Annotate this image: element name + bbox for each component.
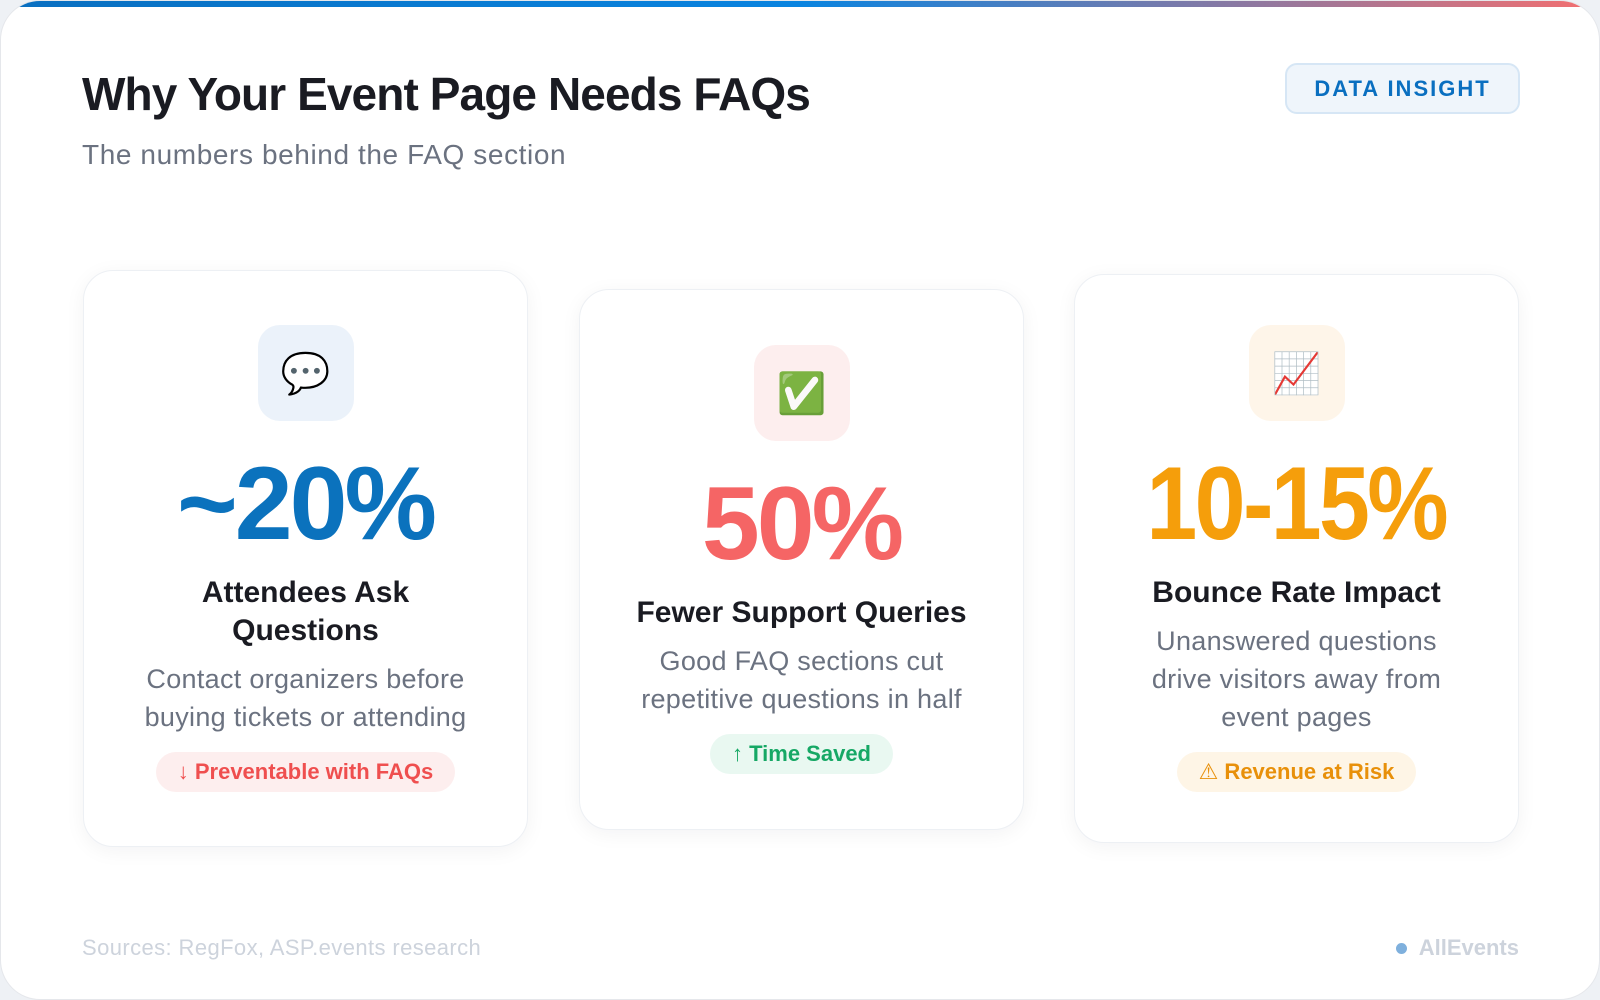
subtitle: The numbers behind the FAQ section (82, 139, 566, 170)
stat: ~20%: ~20% (177, 446, 434, 562)
label: Bounce Rate Impact (1152, 576, 1441, 609)
description: event pages (1221, 702, 1372, 732)
label: Attendees Ask (202, 576, 409, 609)
pill: time saved: ↑ Time Saved (732, 741, 871, 766)
description: buying tickets or attending (145, 702, 466, 732)
description: Contact organizers before (146, 664, 465, 694)
icon: chart (1248, 325, 1344, 421)
icon: check mark: ✅ (777, 372, 826, 416)
description (641, 646, 962, 714)
footer: brand: AllEvents (1419, 935, 1519, 960)
panel: attendees ask questions (83, 270, 528, 847)
label (202, 576, 410, 647)
description (1152, 626, 1441, 732)
description: drive visitors away from (1152, 664, 1441, 694)
pill: preventable: ↓ Preventable with FAQs (178, 759, 433, 784)
footer: sources: Sources: RegFox, ASP.events research (82, 935, 481, 960)
badge: data insight (1285, 63, 1520, 114)
stat: 10-15%: 10-15% (1147, 446, 1446, 562)
pill: revenue at risk (1177, 752, 1416, 792)
pill: preventable (156, 752, 455, 792)
panel: bounce rate impact (1074, 274, 1519, 843)
stat: 50%: 50% (702, 466, 901, 582)
panel: fewer support queries (579, 289, 1024, 830)
badge: data insight: DATA INSIGHT (1314, 76, 1491, 100)
icon: chart: 📈 (1272, 352, 1321, 396)
pill: revenue at risk: ⚠ Revenue at Risk (1199, 759, 1394, 784)
pill: time saved (710, 734, 893, 774)
description: Good FAQ sections cut (660, 646, 943, 676)
icon: speech bubble: 💬 (281, 352, 330, 396)
label: Fewer Support Queries (636, 596, 967, 629)
description: repetitive questions in half (641, 684, 962, 714)
icon: speech bubble (258, 325, 354, 421)
icon: check mark (754, 345, 850, 441)
description (145, 664, 466, 732)
label: Questions (232, 614, 379, 647)
description: Unanswered questions (1156, 626, 1437, 656)
title: Why Your Event Page Needs FAQs (82, 68, 810, 120)
